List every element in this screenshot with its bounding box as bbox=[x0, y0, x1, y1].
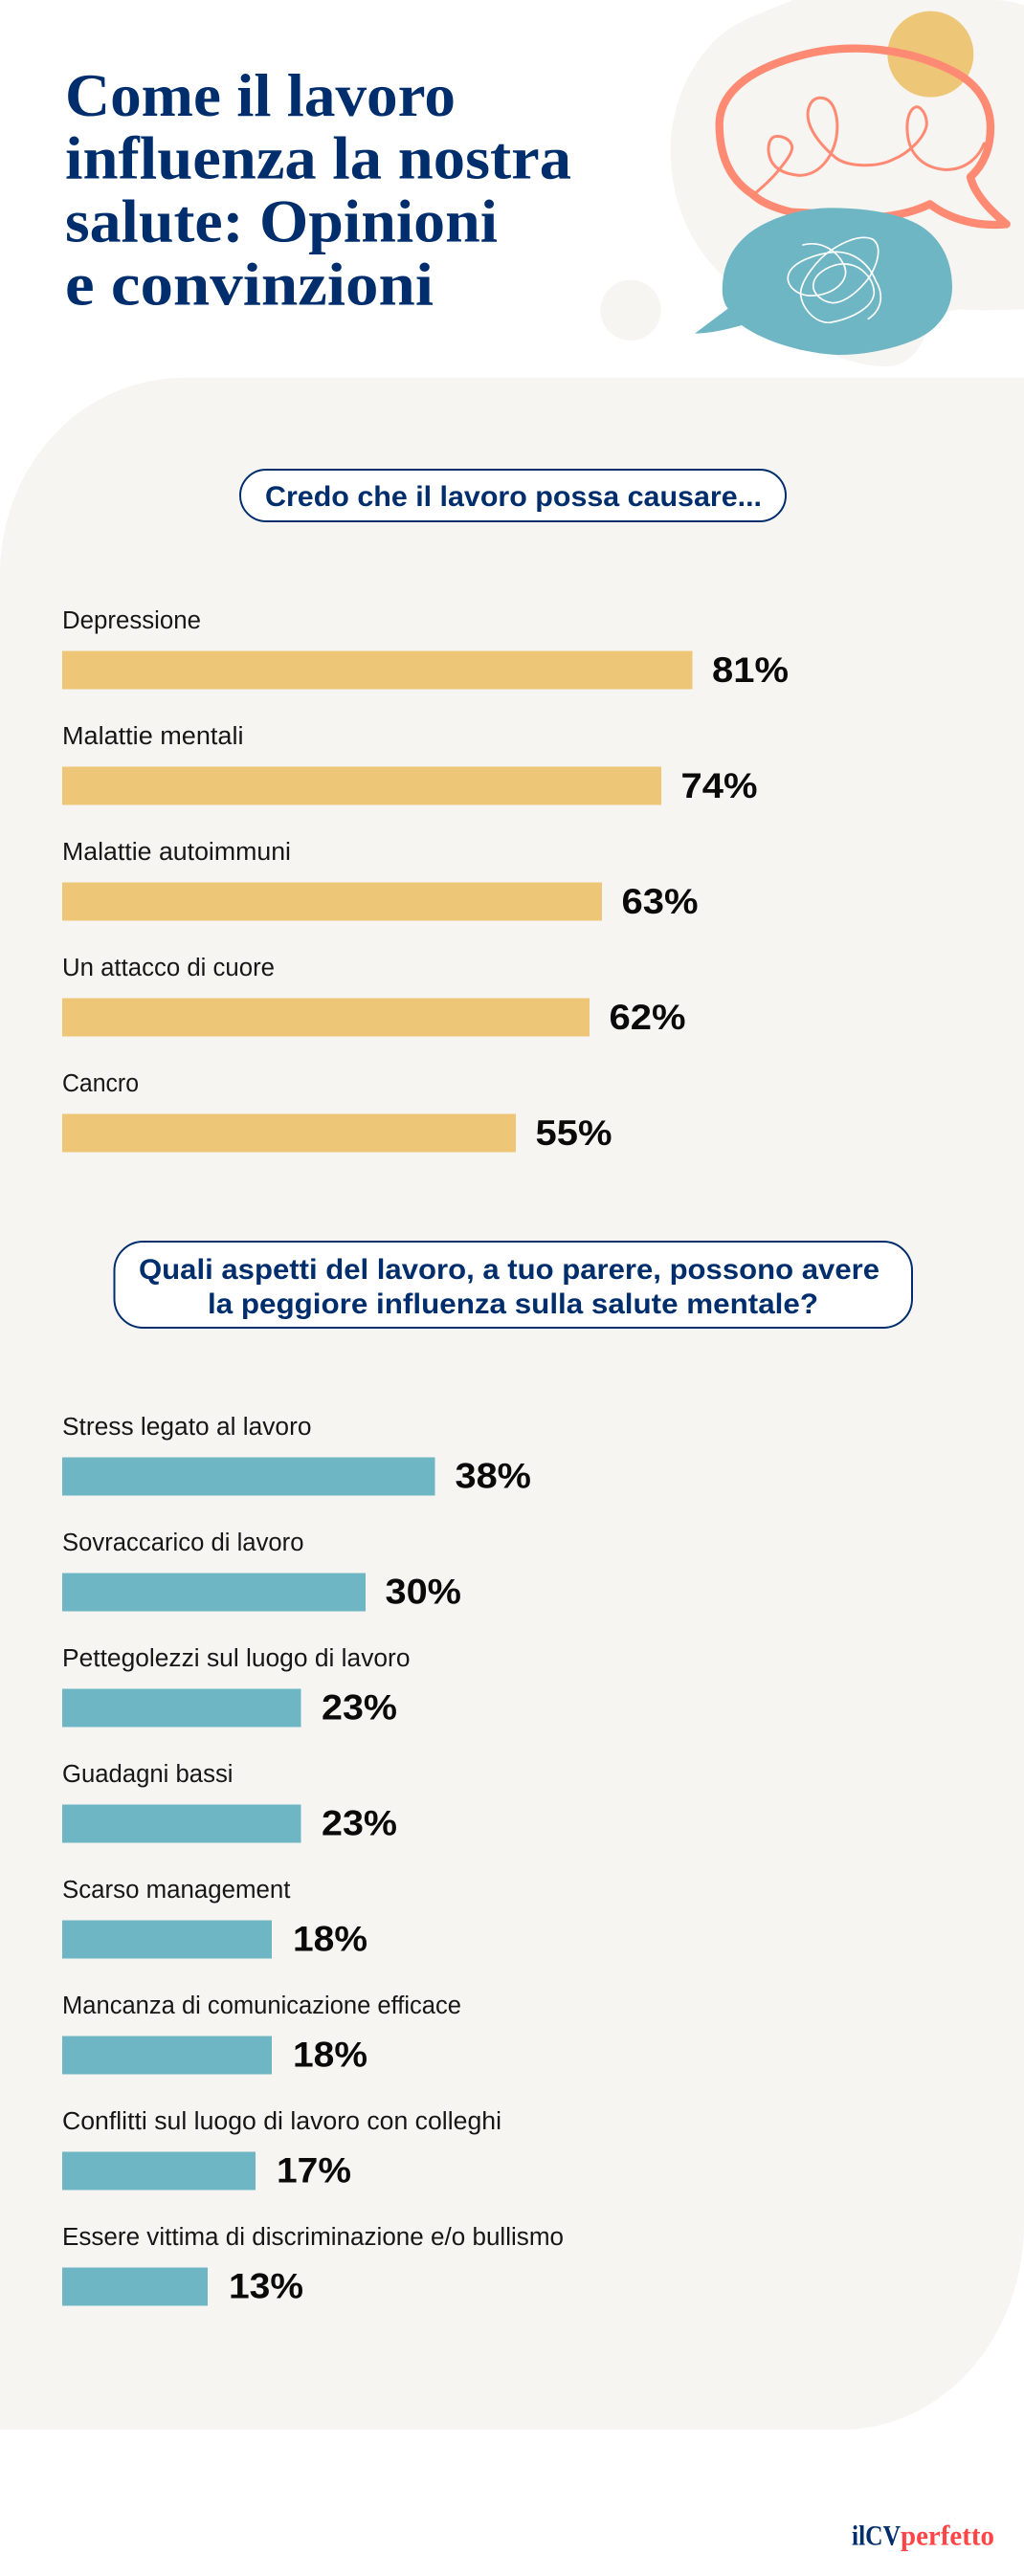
row: Pettegolezzi sul luogo di lavoro 23%: Pettegolezzi sul luogo di lavoro bbox=[62, 1645, 410, 1672]
bar chart: aspects bbox=[62, 1414, 564, 2305]
title bbox=[65, 61, 571, 318]
title: salute: Opinioni bbox=[65, 187, 498, 254]
row: Depressione 81% bbox=[62, 607, 789, 690]
logo: perfetto bbox=[901, 2520, 994, 2552]
heading pill: aspects bbox=[115, 1242, 912, 1328]
heading pill: causes bbox=[240, 470, 786, 521]
row: Depressione 81%: 81% bbox=[712, 650, 789, 690]
title: Come il lavoro bbox=[65, 61, 456, 129]
white scribble bbox=[788, 237, 880, 322]
row: Guadagni bassi 23%: Guadagni bassi bbox=[62, 1761, 234, 1788]
row: Mancanza di comunicazione efficace 18% bbox=[62, 1993, 461, 2074]
logo bbox=[852, 2520, 994, 2552]
row: Un attacco di cuore 62%: 62% bbox=[609, 997, 685, 1037]
row: Malattie autoimmuni 63% bbox=[62, 839, 699, 921]
panel background bbox=[0, 378, 1024, 2430]
row: Guadagni bassi 23% bbox=[62, 1761, 397, 1842]
logo: ilCV bbox=[852, 2520, 901, 2552]
row: Conflitti sul luogo di lavoro con colleghi 17%: Conflitti sul luogo di lavoro con colleghi bbox=[62, 2108, 501, 2135]
row: Malattie autoimmuni 63%: Malattie autoimmuni bbox=[62, 839, 291, 866]
row: Sovraccarico di lavoro 30%: 30% bbox=[385, 1571, 461, 1611]
row: Malattie mentali 74% bbox=[62, 723, 758, 805]
row: Guadagni bassi 23%: 23% bbox=[322, 1802, 397, 1842]
heading pill: aspects: la peggiore influenza sulla salute mentale? bbox=[208, 1288, 818, 1320]
row: Sovraccarico di lavoro 30% bbox=[62, 1530, 461, 1611]
red squiggle bbox=[754, 98, 984, 194]
heading pill: causes: Credo che il lavoro possa causare... bbox=[265, 481, 762, 513]
row: Malattie mentali 74%: 74% bbox=[681, 765, 758, 805]
bar chart: causes bbox=[62, 607, 789, 1153]
row: Depressione 81%: Depressione bbox=[62, 607, 201, 634]
row: Stress legato al lavoro 38% bbox=[62, 1414, 531, 1496]
row: Scarso management 18% bbox=[62, 1877, 367, 1959]
row: Mancanza di comunicazione efficace 18%: 18% bbox=[293, 2034, 367, 2074]
row: Pettegolezzi sul luogo di lavoro 23%: 23% bbox=[322, 1687, 397, 1728]
row: Essere vittima di discriminazione e/o bullismo 13%: 13% bbox=[229, 2265, 303, 2305]
row: Stress legato al lavoro 38%: Stress legato al lavoro bbox=[62, 1414, 312, 1441]
row: Un attacco di cuore 62%: Un attacco di cuore bbox=[62, 955, 275, 981]
yellow circle bbox=[887, 11, 973, 98]
row: Essere vittima di discriminazione e/o bullismo 13% bbox=[62, 2224, 564, 2305]
row: Conflitti sul luogo di lavoro con colleghi 17% bbox=[62, 2108, 501, 2191]
row: Malattie autoimmuni 63%: 63% bbox=[622, 881, 699, 921]
title: e convinzioni bbox=[65, 251, 434, 318]
row: Cancro 55%: 55% bbox=[536, 1112, 612, 1153]
row: Conflitti sul luogo di lavoro con colleghi 17%: 17% bbox=[277, 2150, 351, 2191]
section: aspects bbox=[62, 1242, 912, 2305]
row: Malattie mentali 74%: Malattie mentali bbox=[62, 723, 243, 750]
row: Scarso management 18%: Scarso management bbox=[62, 1877, 291, 1904]
row: Cancro 55% bbox=[62, 1070, 612, 1153]
red speech bubble outline bbox=[720, 49, 1007, 225]
illustration: speech bubbles bbox=[600, 0, 1024, 366]
heading pill: aspects: Quali aspetti del lavoro, a tuo parere, possono avere bbox=[139, 1254, 879, 1286]
small beige circle bbox=[600, 280, 661, 341]
row: Un attacco di cuore 62% bbox=[62, 955, 685, 1037]
background blob bbox=[671, 0, 1024, 366]
row: Sovraccarico di lavoro 30%: Sovraccarico di lavoro bbox=[62, 1530, 304, 1556]
teal speech bubble bbox=[695, 208, 952, 355]
row: Pettegolezzi sul luogo di lavoro 23% bbox=[62, 1645, 410, 1728]
title: influenza la nostra bbox=[65, 124, 571, 191]
section: causes bbox=[62, 470, 789, 1153]
row: Mancanza di comunicazione efficace 18%: Mancanza di comunicazione efficace bbox=[62, 1993, 461, 2019]
row: Scarso management 18%: 18% bbox=[293, 1919, 367, 1959]
row: Essere vittima di discriminazione e/o bullismo 13%: Essere vittima di discriminazione e/o bullismo bbox=[62, 2224, 564, 2251]
row: Stress legato al lavoro 38%: 38% bbox=[456, 1456, 531, 1496]
row: Cancro 55%: Cancro bbox=[62, 1070, 139, 1097]
